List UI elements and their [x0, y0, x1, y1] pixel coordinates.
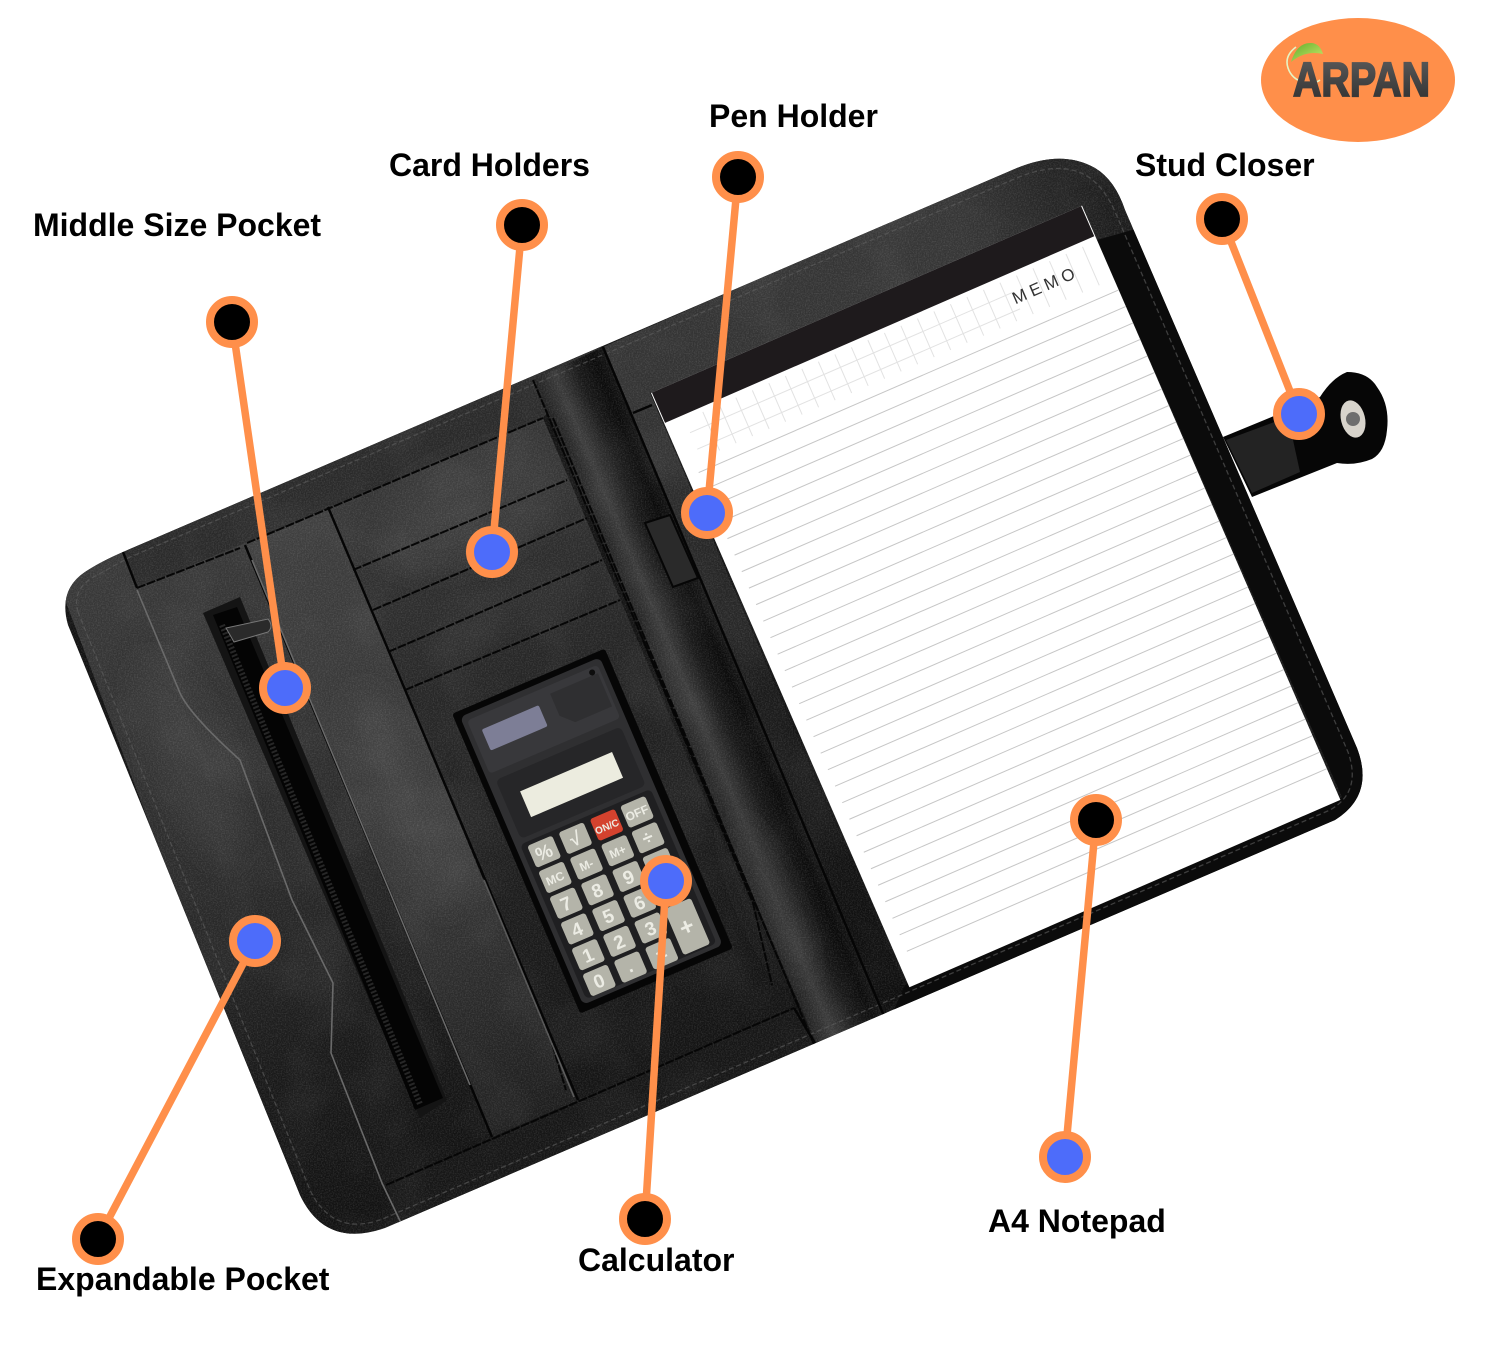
- callout: Calculator: Calculator: [578, 1242, 734, 1278]
- logo: Arpan: [1261, 18, 1455, 142]
- calculator keypad: ON/C: [594, 818, 621, 837]
- calculator keypad: 3: [642, 918, 660, 941]
- icon: zip of middle size pocket: [203, 597, 447, 1118]
- panel: black right border around notepad: [894, 230, 1363, 1010]
- calculator keypad: 4: [568, 919, 587, 942]
- calculator keypad: .: [623, 956, 636, 978]
- calculator keypad: √: [567, 828, 585, 852]
- callout: Expandable Pocket: [36, 919, 330, 1297]
- callout: Stud Closer: [1135, 147, 1321, 436]
- calculator keypad: 1: [579, 944, 598, 968]
- calculator keypad: MC: [544, 868, 567, 889]
- calculator sensor plate: [550, 673, 612, 727]
- notepad memo grid: [684, 247, 1099, 458]
- calculator top plate: [467, 665, 620, 774]
- callout: Pen Holder: [685, 98, 878, 535]
- icon: stud closure strap: [1223, 372, 1388, 497]
- calculator keypad: 9: [620, 866, 638, 890]
- panel: top band of right cover: [604, 158, 1133, 393]
- panel: expandable pocket: [66, 506, 431, 1234]
- calculator keypad: M+: [607, 842, 628, 862]
- notepad memo label: MEMO: [1009, 262, 1082, 308]
- calculator keypad: M-: [577, 856, 596, 874]
- notepad black binding band: [652, 206, 1094, 423]
- calculator keypad: %: [532, 840, 556, 866]
- notepad ruled lines: [699, 290, 1327, 951]
- callout: Stud Closer: Stud Closer: [1135, 147, 1315, 183]
- callout: Pen Holder: Pen Holder: [709, 98, 878, 134]
- calculator keypad: 5: [600, 905, 618, 929]
- seams and stitching: [77, 168, 1352, 1225]
- calculator keypad: OFF: [623, 802, 651, 824]
- calculator keypad: 8: [589, 880, 607, 903]
- calculator keypad: 0: [590, 970, 608, 994]
- leather grain: [66, 159, 1342, 1234]
- calculator: [452, 649, 733, 1014]
- callout: Expandable Pocket: Expandable Pocket: [36, 1261, 330, 1297]
- calculator solar panel: [482, 705, 548, 751]
- calculator keypad: [520, 789, 717, 999]
- calculator keypad: ÷: [639, 827, 657, 850]
- panel: top strip of left cover: [123, 345, 603, 588]
- panel: card holder and calculator section: [330, 418, 722, 952]
- calculator keypad: =: [653, 943, 671, 967]
- callout: Card Holders: Card Holders: [389, 147, 590, 183]
- panel: strip between spine and notepad: [603, 347, 905, 1016]
- leather blotches: [222, 448, 826, 1110]
- icon: pen holder loop: [645, 515, 698, 587]
- soft highlights: [156, 471, 775, 947]
- calculator keypad: 6: [631, 892, 649, 916]
- callout: A4 Notepad: A4 Notepad: [988, 1203, 1166, 1239]
- calculator keypad: ×: [650, 853, 668, 877]
- callout: Card Holders: [389, 147, 590, 574]
- calculator keypad: 7: [557, 893, 575, 917]
- callout: Middle Size Pocket: [33, 207, 321, 710]
- callout: Middle Size Pocket: Middle Size Pocket: [33, 207, 321, 243]
- calculator keypad: +: [675, 912, 699, 942]
- folio: open black leather organiser: [65, 158, 1363, 1234]
- panel: middle band beside zip: [245, 507, 578, 1137]
- calculator keypad: 2: [611, 931, 629, 955]
- panel: bottom strip of left cover: [398, 1044, 814, 1222]
- callout: Calculator: [578, 859, 734, 1278]
- callout: A4 Notepad: [988, 798, 1166, 1239]
- logo: Arpan: ARPAN: [1293, 54, 1430, 107]
- calculator display: [496, 727, 646, 839]
- notepad: A4 ruled memo paper: [651, 206, 1340, 987]
- panel: centre spine: [533, 347, 884, 1050]
